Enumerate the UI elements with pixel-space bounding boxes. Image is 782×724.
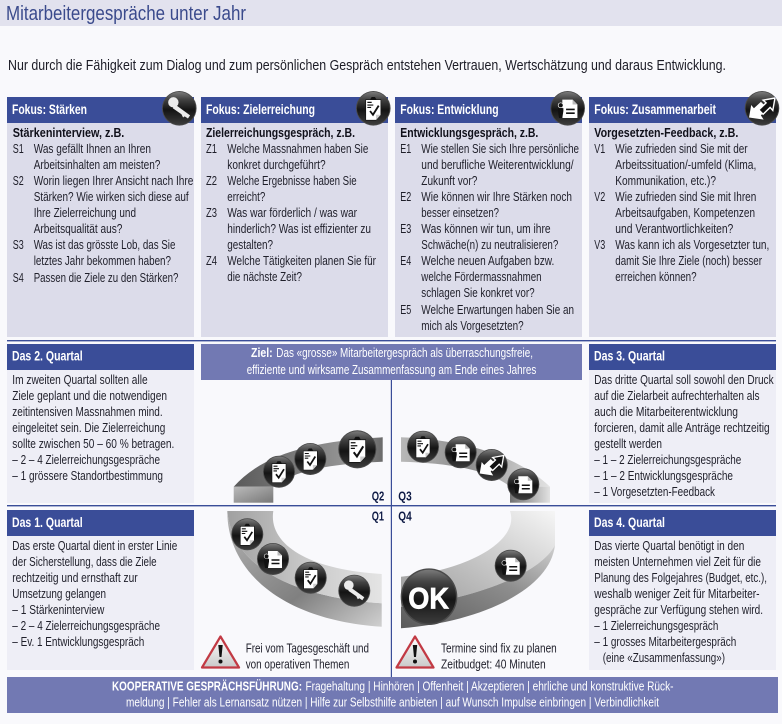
icon: document with person	[550, 91, 585, 126]
warning: free from daily business: Frei vom Tagesgeschäft und	[246, 642, 369, 656]
questions V1 to V3: erreichen können?	[615, 270, 697, 284]
questions E1 to E5: welche Fördermassnahmen	[421, 270, 542, 284]
heading: Fokus Entwicklung: Fokus: Entwicklung	[400, 102, 499, 117]
questions Z1 to Z4: Welche Ergebnisse haben Sie	[227, 174, 357, 188]
icon: clipboard	[295, 562, 327, 594]
text: first quarter: – 2 – 4 Zielerreichungsgespräche	[12, 619, 160, 633]
text: first quarter: der Sicherstellung, dass die Ziele	[12, 555, 157, 569]
questions V1 to V3: Wie zufrieden sind Sie mit der	[615, 142, 748, 156]
text: fourth quarter: – 1 Zielerreichungsgespräch	[594, 619, 718, 633]
questions S1 to S4	[13, 142, 193, 285]
questions E1 to E5: Wie können wir Ihre Stärken noch	[421, 190, 572, 204]
questions E1 to E5: besser einsetzen?	[421, 206, 499, 220]
questions E1 to E5: und berufliche Weiterentwicklung/	[421, 158, 574, 172]
footer: cooperative conversation: Fragehaltung | Hinhören | Offenheit | Akzeptieren | ehrliche und konstruktive Rück-	[306, 680, 674, 694]
label Q2: Q2	[372, 490, 384, 504]
questions E1 to E5: Was können wir tun, um ihre	[421, 222, 551, 236]
warning: fixed dates and time budget: Termine sind fix zu planen	[441, 642, 557, 656]
footer: cooperative conversation: meldung | Fehler als Lernansatz nützen | Hilfe zur Selbsthilfe anbieten | auf Wunsch Impulse einbringen | Verbindlichkeit	[126, 696, 659, 710]
icon: warning triangle	[202, 636, 239, 668]
questions Z1 to Z4: Z1	[206, 142, 217, 156]
footer: cooperative conversation: KOOPERATIVE GESPRÄCHSFÜHRUNG:	[112, 679, 302, 694]
questions S1 to S4: Arbeitsqualität aus?	[34, 222, 122, 236]
questions V1 to V3: V1	[594, 142, 605, 156]
text: second quarter: Ziele geplant und die notwendigen	[12, 389, 167, 403]
questions E1 to E5: mich als Vorgesetzten?	[421, 319, 524, 333]
questions Z1 to Z4: Z2	[206, 174, 217, 188]
questions Z1 to Z4	[206, 142, 376, 284]
questions S1 to S4: S4	[13, 271, 24, 285]
text: first quarter	[12, 539, 177, 649]
questions E1 to E5: schlagen Sie konkret vor?	[421, 286, 535, 300]
heading: Das 4. Quartal: Das 4. Quartal	[594, 515, 665, 530]
ring segment Q1 with icons	[227, 511, 382, 627]
questions Z1 to Z4: Z4	[206, 254, 217, 268]
icon: clipboard	[294, 443, 326, 475]
text: fourth quarter: (eine «Zusammenfassung»)	[603, 651, 725, 665]
text: second quarter: sollte zwischen 50 – 60 % betragen.	[12, 437, 174, 451]
callout: Ziel: effiziente und wirksame Zusammenfassung am Ende eines Jahres	[247, 363, 536, 377]
questions Z1 to Z4: erreicht?	[227, 190, 265, 204]
questions E1 to E5: Welche neuen Aufgaben bzw.	[421, 254, 554, 268]
icon: document	[445, 436, 477, 468]
questions E1 to E5: E1	[400, 142, 411, 156]
panel: Fokus Zielerreichung	[201, 91, 391, 337]
heading: Fokus Zusammenarbeit: Fokus: Zusammenarbeit	[594, 102, 716, 117]
icon: OK button	[401, 568, 457, 625]
callout: Ziel: Das «grosse» Mitarbeitergespräch als überraschungsfreie,	[276, 346, 533, 360]
questions S1 to S4: Was ist das grösste Lob, das Sie	[34, 238, 175, 252]
questions E1 to E5: E5	[400, 303, 411, 317]
questions V1 to V3	[594, 142, 769, 284]
panel: Das 3. Quartal	[589, 344, 776, 503]
icon: document	[507, 468, 539, 500]
questions Z1 to Z4: Was war förderlich / was war	[227, 206, 357, 220]
questions Z1 to Z4: gestalten?	[227, 238, 273, 252]
questions S1 to S4: Ihre Zielerreichung und	[34, 206, 136, 220]
warning: fixed dates and time budget: Zeitbudget: 40 Minuten	[441, 658, 546, 672]
questions S1 to S4: letztes Jahr bekommen haben?	[34, 254, 171, 268]
text: second quarter: zeitintensiven Massnahmen mind.	[12, 405, 163, 419]
questions E1 to E5: Zukunft vor?	[421, 174, 477, 188]
subheading: Stärkeninterview, z.B.	[13, 125, 124, 140]
questions V1 to V3: und Verantwortlichkeiten?	[615, 222, 733, 236]
text: fourth quarter: – 1 grosses Mitarbeitergespräch	[594, 635, 736, 649]
icon: key	[338, 575, 370, 607]
questions E1 to E5: Wie stellen Sie sich Ihre persönliche	[421, 142, 579, 156]
callout: Ziel: Ziel:	[251, 346, 273, 360]
icon: clipboard	[407, 431, 439, 463]
title bar	[0, 0, 782, 26]
panel: Fokus Stärken	[7, 91, 197, 337]
text: third quarter: gestellt werden	[594, 437, 662, 451]
icon: clipboard	[356, 91, 391, 126]
warning: free from daily business: von operativen Themen	[246, 658, 349, 672]
subheading: Vorgesetzten-Feedback, z.B.	[594, 125, 738, 140]
text: second quarter: – 1 grössere Standortbestimmung	[12, 469, 163, 483]
questions V1 to V3: V2	[594, 190, 605, 204]
questions Z1 to Z4: hinderlich? Was ist effizienter zu	[227, 222, 371, 236]
text: first quarter: – Ev. 1 Entwicklungsgespräch	[12, 635, 144, 649]
warning: fixed dates and time budget	[396, 636, 557, 672]
heading: Das 3. Quartal: Das 3. Quartal	[594, 348, 665, 364]
panel: Fokus Entwicklung	[395, 91, 585, 337]
footer: cooperative conversation	[7, 677, 778, 713]
panel: Das 4. Quartal	[589, 510, 776, 670]
ring segment Q3 with icons	[401, 431, 550, 503]
questions E1 to E5: E2	[400, 190, 411, 204]
questions V1 to V3: V3	[594, 238, 605, 252]
questions S1 to S4: Arbeitsinhalten am meisten?	[34, 158, 160, 172]
heading: Das 2. Quartal: Das 2. Quartal	[12, 348, 83, 364]
questions Z1 to Z4: die nächste Zeit?	[227, 270, 302, 284]
questions E1 to E5: E4	[400, 254, 411, 268]
questions S1 to S4: S2	[13, 174, 24, 188]
questions Z1 to Z4: Welche Tätigkeiten planen Sie für	[227, 254, 376, 268]
text: first quarter: – 1 Stärkeninterview	[12, 603, 105, 617]
ring segment Q4 with icons	[401, 511, 555, 628]
heading: Fokus Stärken: Fokus: Stärken	[12, 102, 87, 117]
warning: free from daily business	[202, 636, 369, 672]
label Q1: Q1	[372, 510, 384, 524]
heading: Das 1. Quartal: Das 1. Quartal	[12, 515, 83, 530]
panel: Das 1. Quartal	[7, 510, 194, 670]
subheading: Zielerreichungsgespräch, z.B.	[206, 125, 355, 140]
text: fourth quarter: Das vierte Quartal benötigt in den	[594, 539, 744, 553]
icon: two arrows	[745, 91, 779, 126]
icon: clipboard large	[338, 430, 376, 468]
questions E1 to E5: E3	[400, 222, 411, 236]
questions Z1 to Z4: Welche Massnahmen haben Sie	[227, 142, 368, 156]
title bar: Mitarbeitergespräche unter Jahr	[6, 3, 246, 25]
questions S1 to S4: Passen die Ziele zu den Stärken?	[34, 271, 178, 285]
icon: arrows	[476, 449, 508, 481]
questions Z1 to Z4: Z3	[206, 206, 217, 220]
text: second quarter: eingeleitet sein. Die Zielerreichung	[12, 421, 165, 435]
icon: key	[162, 91, 197, 126]
ring segment Q2 with icons	[234, 430, 383, 503]
heading: Fokus Zielerreichung: Fokus: Zielerreichung	[206, 102, 315, 117]
icon: clipboard	[263, 456, 295, 488]
questions S1 to S4: S1	[13, 142, 24, 156]
questions E1 to E5	[400, 142, 579, 333]
icon: warning triangle	[396, 636, 434, 668]
text: third quarter: – 1 – 2 Entwicklungsgespräche	[594, 469, 733, 483]
icon: clipboard	[231, 518, 263, 550]
text: first quarter: Umsetzung gelangen	[12, 587, 106, 601]
icon: OK button: OK	[408, 582, 449, 615]
text: third quarter: auch die Mitarbeiterentwicklung	[594, 405, 738, 419]
label Q3: Q3	[398, 490, 412, 504]
questions S1 to S4: Stärken? Wie wirken sich diese auf	[34, 190, 189, 204]
questions E1 to E5: Welche Erwartungen haben Sie an	[421, 303, 574, 317]
questions S1 to S4: Was gefällt Ihnen an Ihren	[34, 142, 151, 156]
panel: Fokus Zusammenarbeit	[589, 91, 779, 337]
label Q4: Q4	[398, 510, 412, 524]
icon: document	[495, 550, 527, 582]
text: fourth quarter	[593, 539, 767, 665]
icon: document	[257, 543, 289, 575]
text: third quarter	[594, 373, 774, 499]
text: first quarter: rechtzeitig und ernsthaft zur	[12, 571, 138, 585]
text: second quarter	[12, 373, 174, 483]
panel: Das 2. Quartal	[7, 344, 194, 503]
questions S1 to S4: Worin liegen Ihrer Ansicht nach Ihre	[34, 174, 193, 188]
text: second quarter: Im zweiten Quartal sollten alle	[12, 373, 148, 387]
questions V1 to V3: Kommunikation, etc.)?	[615, 174, 716, 188]
text: third quarter: – 1 – 2 Zielerreichungsgespräche	[594, 453, 741, 467]
questions Z1 to Z4: konkret durchgeführt?	[227, 158, 326, 172]
callout: Ziel	[201, 344, 582, 380]
questions E1 to E5: Schwäche(n) zu neutralisieren?	[421, 238, 558, 252]
subheading: Entwicklungsgespräch, z.B.	[400, 125, 538, 140]
text: first quarter: Das erste Quartal dient in erster Linie	[12, 539, 177, 553]
text: second quarter: – 2 – 4 Zielerreichungsgespräche	[12, 453, 160, 467]
text: third quarter: – 1 Vorgesetzten-Feedback	[594, 485, 716, 499]
questions S1 to S4: S3	[13, 238, 24, 252]
